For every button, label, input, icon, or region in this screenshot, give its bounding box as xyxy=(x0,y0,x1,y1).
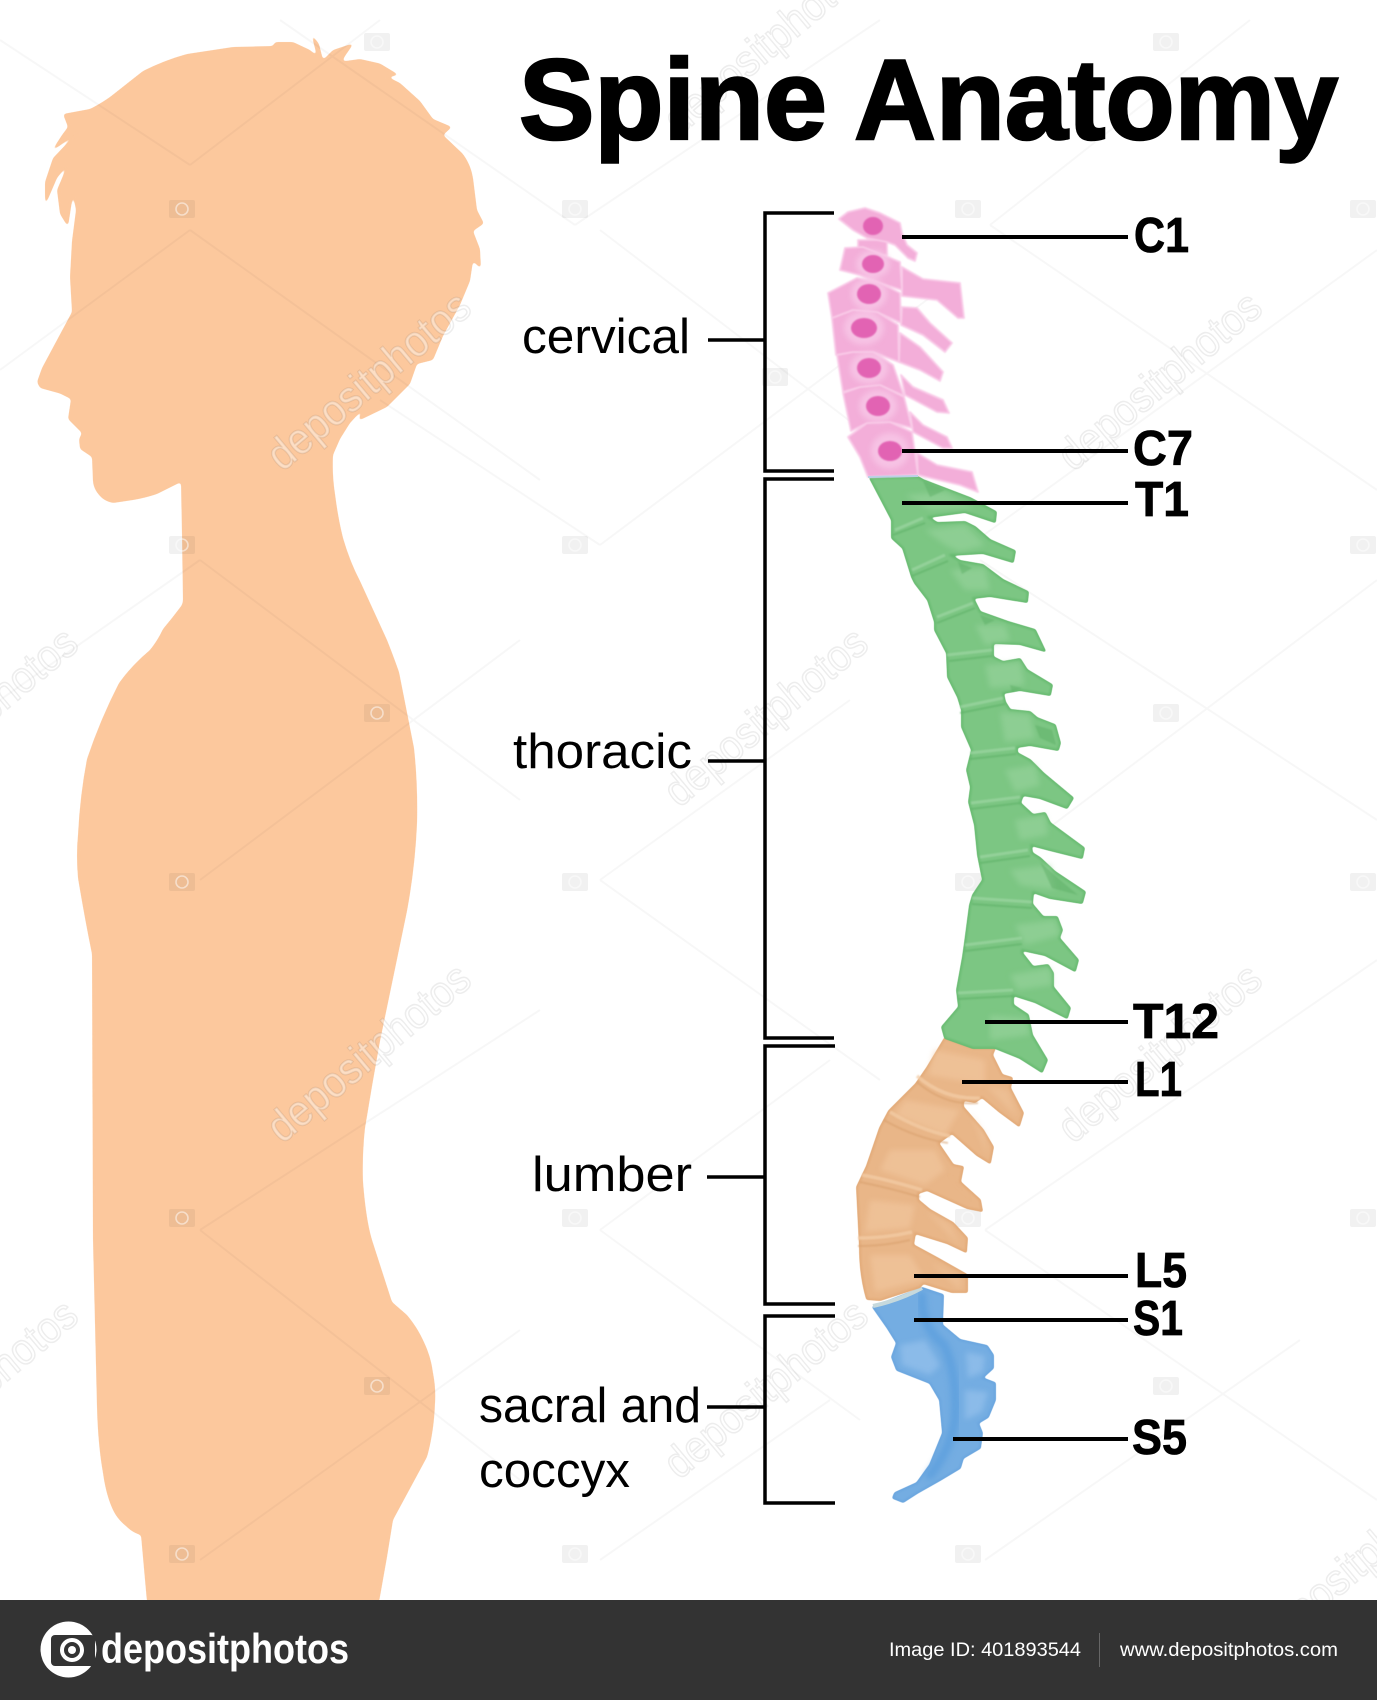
watermark pattern: depositphotos xyxy=(654,1290,877,1488)
human body silhouette xyxy=(37,33,484,1602)
label C1: C1 xyxy=(1134,209,1189,263)
cervical label: cervical xyxy=(522,310,690,364)
cervical vertebrae (pink) xyxy=(828,208,978,492)
label S5: S5 xyxy=(1132,1411,1187,1465)
thoracic bracket xyxy=(765,479,834,1038)
sacral and coccyx label: sacral and xyxy=(479,1379,701,1433)
logo wordmark: depositphotos xyxy=(101,1625,349,1672)
website url: www.depositphotos.com xyxy=(1119,1640,1338,1661)
watermark pattern: depositphotos xyxy=(654,618,877,816)
label L1: L1 xyxy=(1135,1053,1182,1107)
sacral bracket xyxy=(765,1316,835,1503)
lumbar bracket xyxy=(765,1046,835,1304)
cervical bracket xyxy=(765,213,834,471)
region labels xyxy=(479,310,701,1498)
brackets for spine regions xyxy=(707,213,835,1503)
label S1: S1 xyxy=(1133,1292,1183,1346)
label C7: C7 xyxy=(1133,422,1193,476)
watermark pattern: depositphotos xyxy=(257,282,480,480)
image id: Image ID: 401893544 xyxy=(889,1640,1081,1661)
lumber label: lumber xyxy=(532,1148,692,1202)
icon: depositphotos camera logo xyxy=(40,1622,96,1678)
title: Spine Anatomy xyxy=(519,37,1338,164)
vertebra labels xyxy=(1132,209,1219,1465)
label T1: T1 xyxy=(1135,473,1189,527)
label L5: L5 xyxy=(1135,1244,1187,1298)
label T12: T12 xyxy=(1133,995,1219,1049)
watermark pattern: depositphotos xyxy=(1048,282,1271,480)
leader lines xyxy=(902,237,1128,1439)
spine illustration xyxy=(828,208,1085,1502)
footer bar xyxy=(0,1600,1377,1700)
thoracic label: thoracic xyxy=(513,725,692,779)
lumbar vertebrae (orange) xyxy=(857,1038,1023,1300)
thoracic vertebrae (green) xyxy=(870,477,1085,1072)
watermark pattern: depositphotos xyxy=(1048,954,1271,1152)
region labels: coccyx xyxy=(479,1444,630,1498)
watermark pattern: depositphotos xyxy=(257,954,480,1152)
sacrum and coccyx (blue) xyxy=(873,1288,995,1502)
